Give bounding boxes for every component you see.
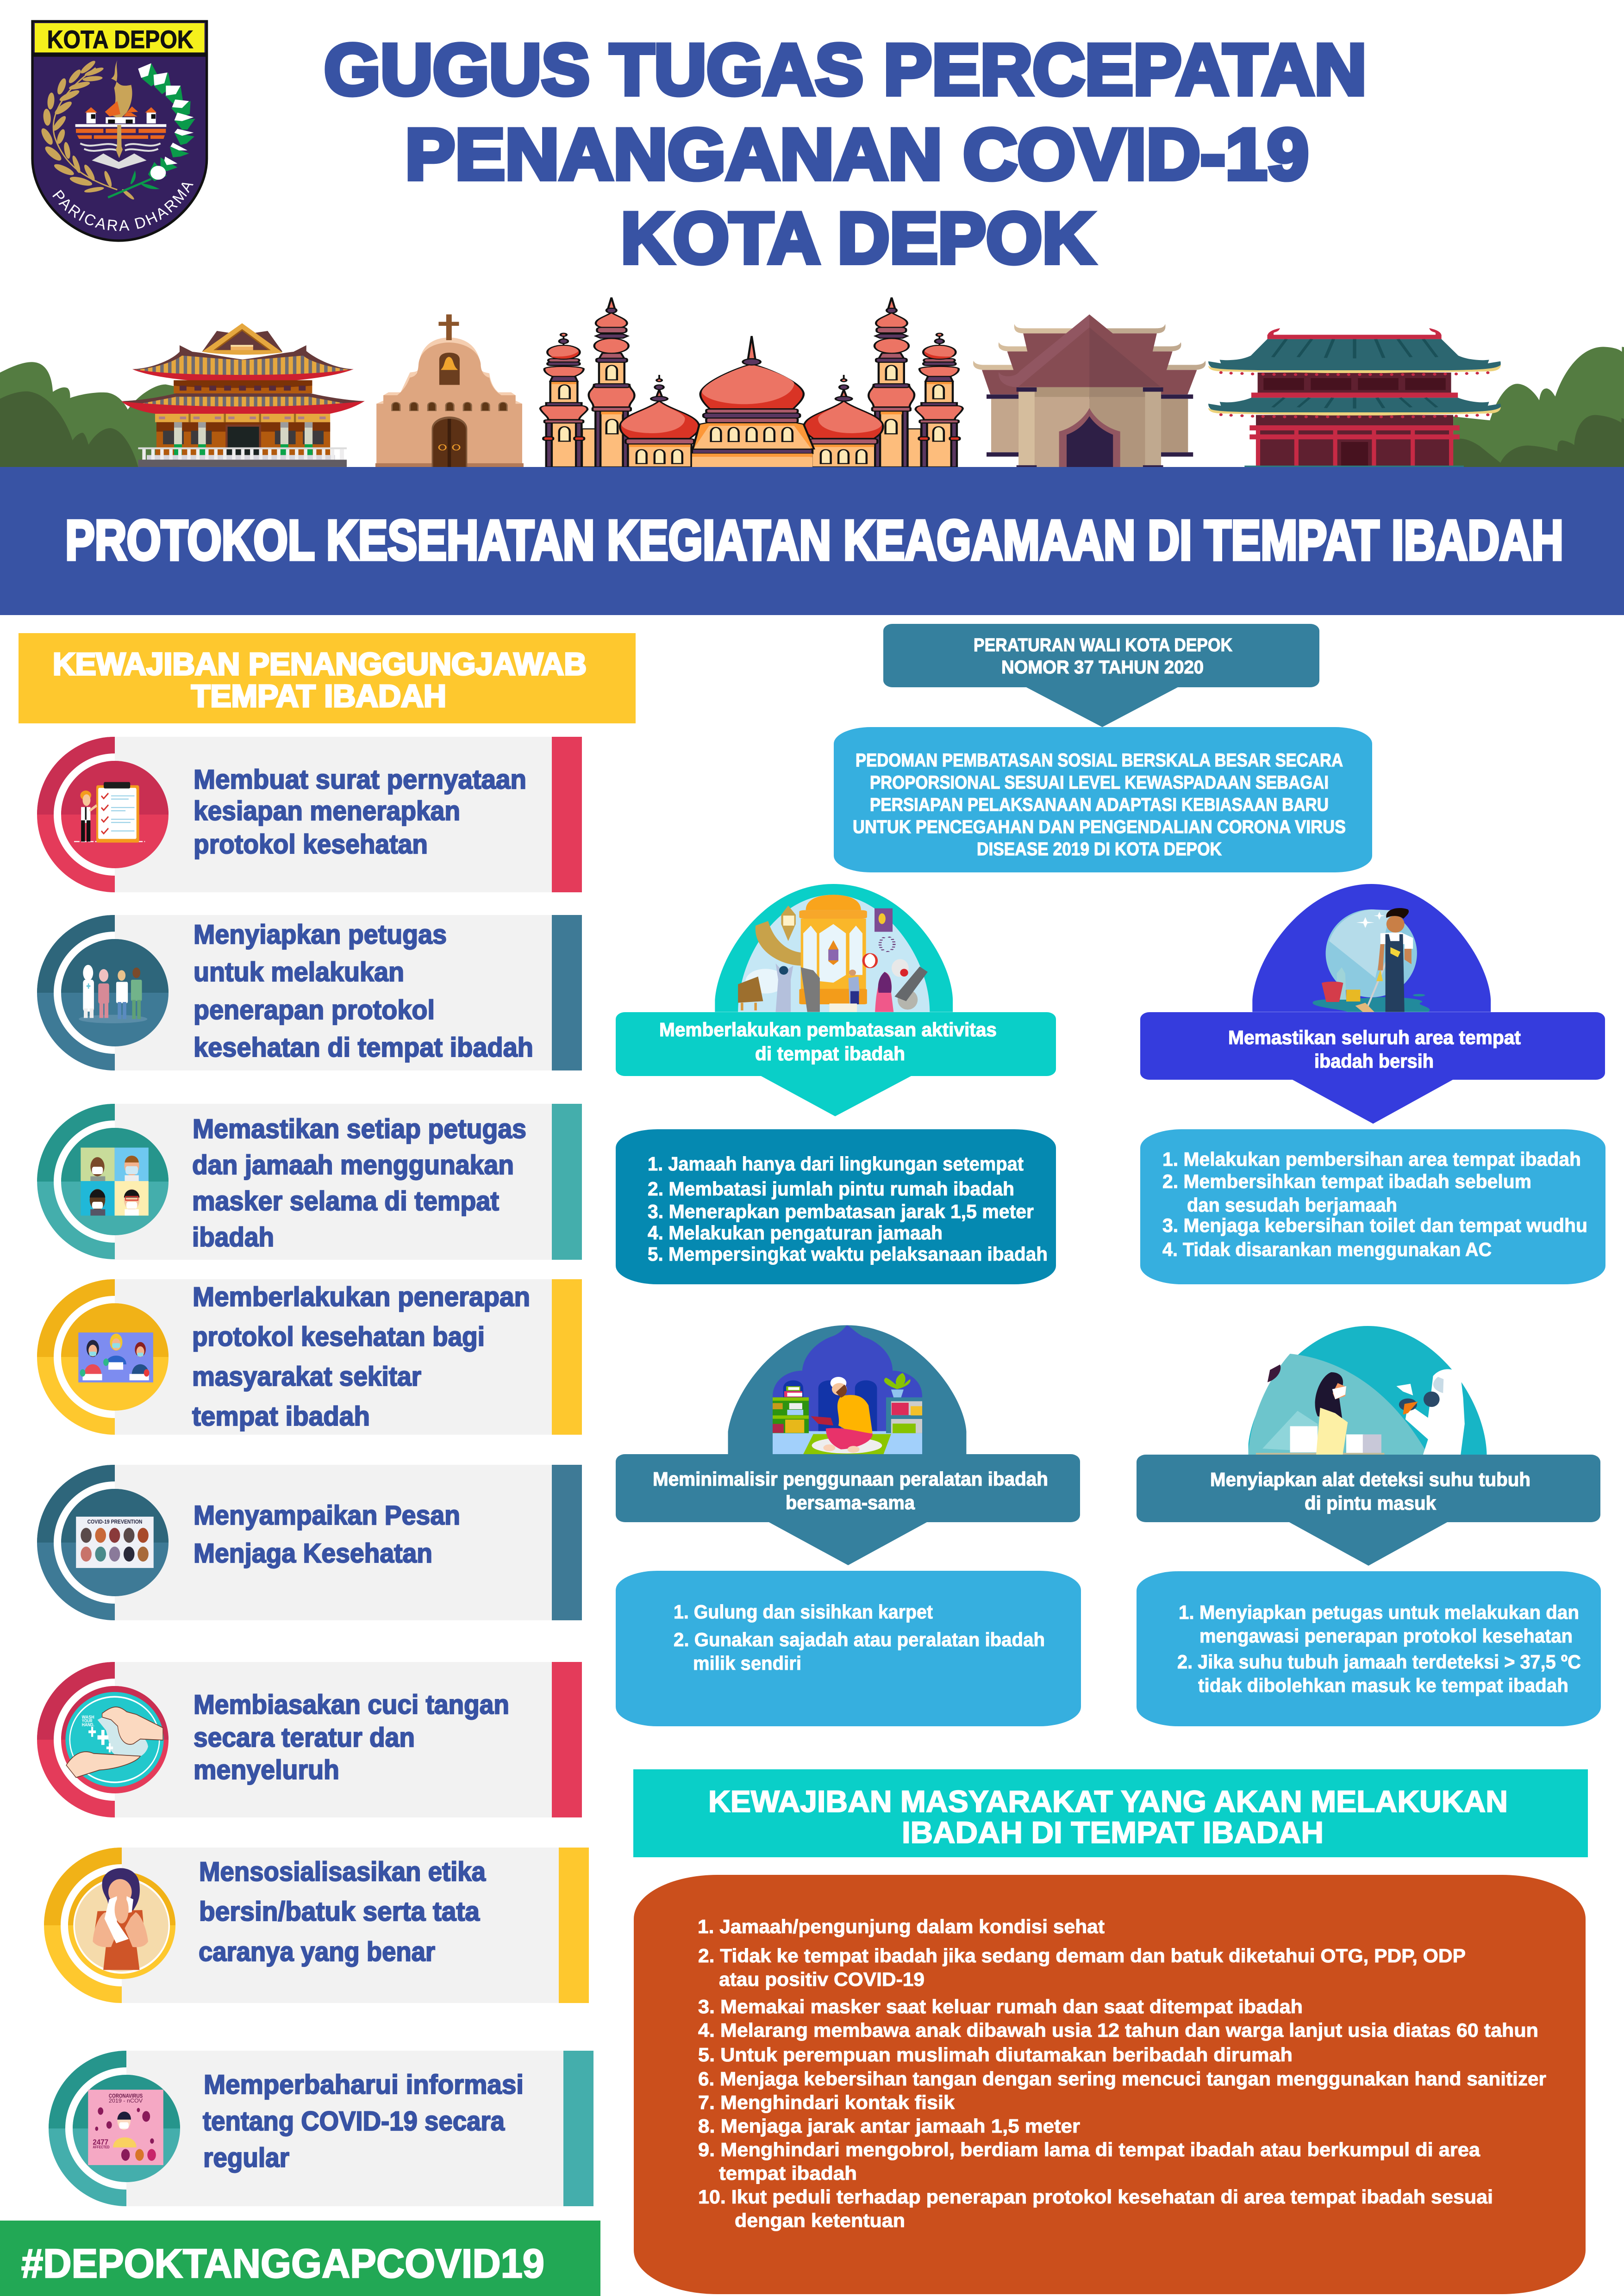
list box: 2. Gunakan sajadah atau peralatan ibadah (674, 1629, 1045, 1650)
panel: pembatasan aktivitas (616, 884, 1056, 1284)
icon: prevention poster (76, 1517, 154, 1568)
text: menyeluruh (194, 1755, 339, 1785)
label box with arrow: Meminimalisir penggunaan peralatan ibadah (653, 1468, 1048, 1490)
text: Mensosialisasikan etika (199, 1857, 486, 1887)
panel: pedoman: UNTUK PENCEGAHAN DAN PENGENDALIAN CORONA VIRUS (853, 817, 1346, 837)
list box: 5. Mempersingkat waktu pelaksanaan ibadah (648, 1243, 1048, 1265)
panel: daftar kewajiban masyarakat: 1. Jamaah/pengunjung dalam kondisi sehat (698, 1916, 1105, 1937)
list box: dan sesudah berjamaah (1187, 1194, 1397, 1216)
text: untuk melakukan (194, 957, 404, 987)
panel: daftar kewajiban masyarakat: 2. Tidak ke tempat ibadah jika sedang demam dan batuk diketahui OTG, PDP, ODP (698, 1945, 1466, 1966)
list box: 1. Melakukan pembersihan area tempat ibadah (1162, 1148, 1581, 1170)
callout: peraturan wali kota: NOMOR 37 TAHUN 2020 (1001, 657, 1204, 678)
icon: dome with praying man (728, 1325, 966, 1454)
panel: daftar kewajiban masyarakat: dengan ketentuan (735, 2209, 905, 2231)
label box with arrow (1140, 1012, 1605, 1124)
text: regular (203, 2143, 289, 2173)
list box: 2. Membatasi jumlah pintu rumah ibadah (648, 1178, 1014, 1200)
list box: 2. Jika suhu tubuh jamaah terdeteksi > 37,5 ºC (1177, 1651, 1581, 1673)
icon: dome with cleaner (1252, 884, 1491, 1012)
text: masyarakat sekitar (192, 1362, 421, 1392)
panel: pedoman: PEDOMAN PEMBATASAN SOSIAL BERSKALA BESAR SECARA (856, 750, 1343, 771)
logo: Kota Depok shield: PARICARA DHARMA (49, 177, 197, 235)
item 3: masker (37, 1104, 582, 1260)
panel: pedoman: PROPORSIONAL SESUAI LEVEL KEWASPADAAN SEBAGAI (870, 772, 1329, 793)
panel: pedoman (834, 727, 1372, 872)
text: masker selama di tempat (192, 1186, 499, 1216)
hashtag banner (0, 2221, 600, 2296)
item 5: pesan kesehatan (37, 1465, 582, 1620)
label box with arrow: ibadah bersih (1314, 1050, 1434, 1072)
label box with arrow (616, 1012, 1056, 1116)
list box: tidak dibolehkan masuk ke tempat ibadah (1198, 1674, 1568, 1696)
list box: mengawasi penerapan protokol kesehatan (1199, 1625, 1573, 1647)
panel: daftar kewajiban masyarakat: 8. Menjaga jarak antar jamaah 1,5 meter (698, 2115, 1080, 2137)
text: caranya yang benar (199, 1937, 435, 1967)
list box: 1. Jamaah hanya dari lingkungan setempat (648, 1153, 1024, 1175)
icon: masked faces (81, 1148, 149, 1216)
label box with arrow: Menyiapkan alat deteksi suhu tubuh (1210, 1468, 1530, 1490)
list box: 1. Menyiapkan petugas untuk melakukan dan (1179, 1601, 1579, 1623)
item 7: etika batuk (44, 1848, 589, 2003)
heading: kewajiban masyarakat: IBADAH DI TEMPAT IBADAH (902, 1815, 1324, 1849)
text (194, 765, 526, 859)
text: penerapan protokol (194, 995, 435, 1025)
item 2: petugas (37, 915, 582, 1070)
panel: daftar kewajiban masyarakat: 6. Menjaga kebersihan tangan dengan sering mencuci tangan menggunakan hand sanitizer (698, 2068, 1546, 2090)
logo: Kota Depok shield (32, 21, 207, 241)
panel: daftar kewajiban masyarakat: 7. Menghindari kontak fisik (698, 2091, 955, 2113)
text: Memberlakukan penerapan (193, 1282, 530, 1312)
logo: Kota Depok shield: KOTA DEPOK (47, 25, 194, 54)
label box with arrow: di tempat ibadah (755, 1043, 905, 1064)
building: Hindu temple (973, 314, 1206, 467)
text: secara teratur dan (194, 1723, 415, 1753)
title (324, 30, 1367, 279)
building: church (375, 314, 524, 467)
list box: 4. Melakukan pengaturan jamaah (648, 1222, 943, 1244)
text: protokol kesehatan (194, 829, 428, 859)
building: Chinese temple (1208, 328, 1501, 467)
icon: hand washing: YOUR (82, 1718, 93, 1724)
panel: daftar kewajiban masyarakat: 5. Untuk perempuan muslimah diutamakan beribadah dirumah (698, 2044, 1293, 2066)
hashtag banner: #DEPOKTANGGAPCOVID19 (21, 2240, 544, 2286)
text (199, 1857, 486, 1967)
text (194, 920, 533, 1063)
text (192, 1114, 526, 1252)
text: ibadah (192, 1222, 274, 1252)
label box with arrow (616, 1454, 1080, 1565)
text: Memperbaharui informasi (204, 2070, 524, 2100)
icon: prevention poster: COVID-19 PREVENTION (87, 1519, 142, 1525)
icon: coronavirus poster: 2477 (93, 2138, 108, 2147)
label box with arrow (1137, 1455, 1600, 1566)
list box: 2. Membersihkan tempat ibadah sebelum (1162, 1170, 1531, 1192)
item 6: cuci tangan (37, 1662, 582, 1817)
icon: coronavirus poster (88, 2090, 163, 2165)
panel: deteksi suhu (1137, 1326, 1601, 1726)
text: Menjaga Kesehatan (194, 1538, 432, 1568)
list box: 4. Tidak disarankan menggunakan AC (1162, 1238, 1492, 1260)
callout: peraturan wali kota (883, 624, 1319, 727)
icon: woman sneezing (74, 1868, 169, 1972)
icon: three people protection (78, 1332, 153, 1382)
list box (1140, 1129, 1605, 1284)
label box with arrow: bersama-sama (786, 1492, 915, 1513)
text: kesiapan menerapkan (194, 796, 460, 826)
panel: daftar kewajiban masyarakat: atau positiv COVID-19 (719, 1968, 924, 1990)
text: tentang COVID-19 secara (203, 2106, 505, 2136)
heading: kewajiban penanggungjawab (19, 633, 636, 723)
list box: milik sendiri (693, 1652, 801, 1674)
title: GUGUS TUGAS PERCEPATAN (324, 30, 1367, 110)
text (194, 1500, 460, 1568)
text: protokol kesehatan bagi (192, 1322, 485, 1352)
text: Menyampaikan Pesan (194, 1500, 460, 1531)
list box: 1. Gulung dan sisihkan karpet (674, 1601, 933, 1623)
list box: 3. Menjaga kebersihan toilet dan tempat wudhu (1162, 1214, 1587, 1236)
text: Membiasakan cuci tangan (194, 1690, 509, 1720)
heading: kewajiban masyarakat (633, 1769, 1588, 1857)
label box with arrow: Memberlakukan pembatasan aktivitas (659, 1019, 997, 1040)
list box: 3. Menerapkan pembatasan jarak 1,5 meter (648, 1201, 1034, 1222)
text: Membuat surat pernyataan (194, 765, 526, 795)
icon: coronavirus poster: 2019 - nCOV (109, 2098, 143, 2104)
item 1: surat pernyataan (37, 737, 582, 892)
panel: daftar kewajiban masyarakat (634, 1875, 1586, 2294)
panel: daftar kewajiban masyarakat: 3. Memakai masker saat keluar rumah dan saat ditempat ibadah (698, 1996, 1303, 2017)
list box (1137, 1571, 1601, 1726)
title: KOTA DEPOK (621, 198, 1094, 279)
background hills left (0, 362, 180, 467)
title: PENANGANAN COVID-19 (405, 114, 1309, 195)
panel: area bersih (1140, 884, 1605, 1284)
panel: pedoman: PERSIAPAN PELAKSANAAN ADAPTASI KEBIASAAN BARU (870, 795, 1329, 815)
list box (616, 1129, 1056, 1284)
icon: coronavirus poster: CORONAVIRUS (109, 2093, 143, 2099)
heading: kewajiban masyarakat: KEWAJIBAN MASYARAKAT YANG AKAN MELAKUKAN (708, 1784, 1508, 1818)
icon: hand washing: HAND. (82, 1722, 94, 1727)
text: Memastikan setiap petugas (193, 1114, 526, 1144)
panel: daftar kewajiban masyarakat: 10. Ikut peduli terhadap penerapan protokol kesehatan di area tempat ibadah sesuai (698, 2186, 1493, 2208)
icon: hand washing: WASH (82, 1714, 94, 1720)
item 4: masyarakat sekitar (37, 1279, 582, 1435)
heading: kewajiban penanggungjawab: TEMPAT IBADAH (191, 678, 446, 714)
text: kesehatan di tempat ibadah (194, 1033, 533, 1063)
panel: daftar kewajiban masyarakat: tempat ibadah (719, 2162, 857, 2184)
text: bersin/batuk serta tata (199, 1897, 480, 1927)
item 8: informasi (49, 2051, 593, 2206)
panel: daftar kewajiban masyarakat: 4. Melarang membawa anak dibawah usia 12 tahun dan warga lanjut usia diatas 60 tahun (698, 2019, 1538, 2041)
panel: daftar kewajiban masyarakat: 9. Menghindari mengobrol, berdiam lama di tempat ibadah atau berkumpul di area (698, 2139, 1480, 2160)
label box with arrow: Memastikan seluruh area tempat (1228, 1027, 1521, 1048)
text (194, 1690, 509, 1785)
background hills right (1453, 347, 1624, 467)
panel: pedoman: DISEASE 2019 DI KOTA DEPOK (977, 839, 1222, 859)
icon: coronavirus poster: AFFECTED (93, 2146, 110, 2150)
building: mosque (540, 298, 963, 467)
callout: peraturan wali kota: PERATURAN WALI KOTA DEPOK (974, 635, 1232, 655)
text (203, 2070, 524, 2173)
text: dan jamaah menggunakan (192, 1150, 514, 1180)
text: Menyiapkan petugas (194, 920, 447, 950)
icon: hand washing (65, 1692, 164, 1787)
list box (616, 1571, 1081, 1726)
icon: dome with ramadan scene (715, 884, 953, 1012)
icon: dome with temperature check (1249, 1326, 1487, 1455)
icon: health workers (79, 965, 147, 1023)
label box with arrow: di pintu masuk (1305, 1492, 1437, 1514)
banner (0, 467, 1624, 615)
text: tempat ibadah (192, 1401, 370, 1431)
heading: kewajiban penanggungjawab: KEWAJIBAN PENANGGUNGJAWAB (53, 647, 587, 682)
text (192, 1282, 530, 1431)
icon: clipboard and man (74, 782, 145, 843)
building: Minang pagoda (122, 323, 365, 467)
panel: peralatan ibadah (616, 1325, 1081, 1726)
